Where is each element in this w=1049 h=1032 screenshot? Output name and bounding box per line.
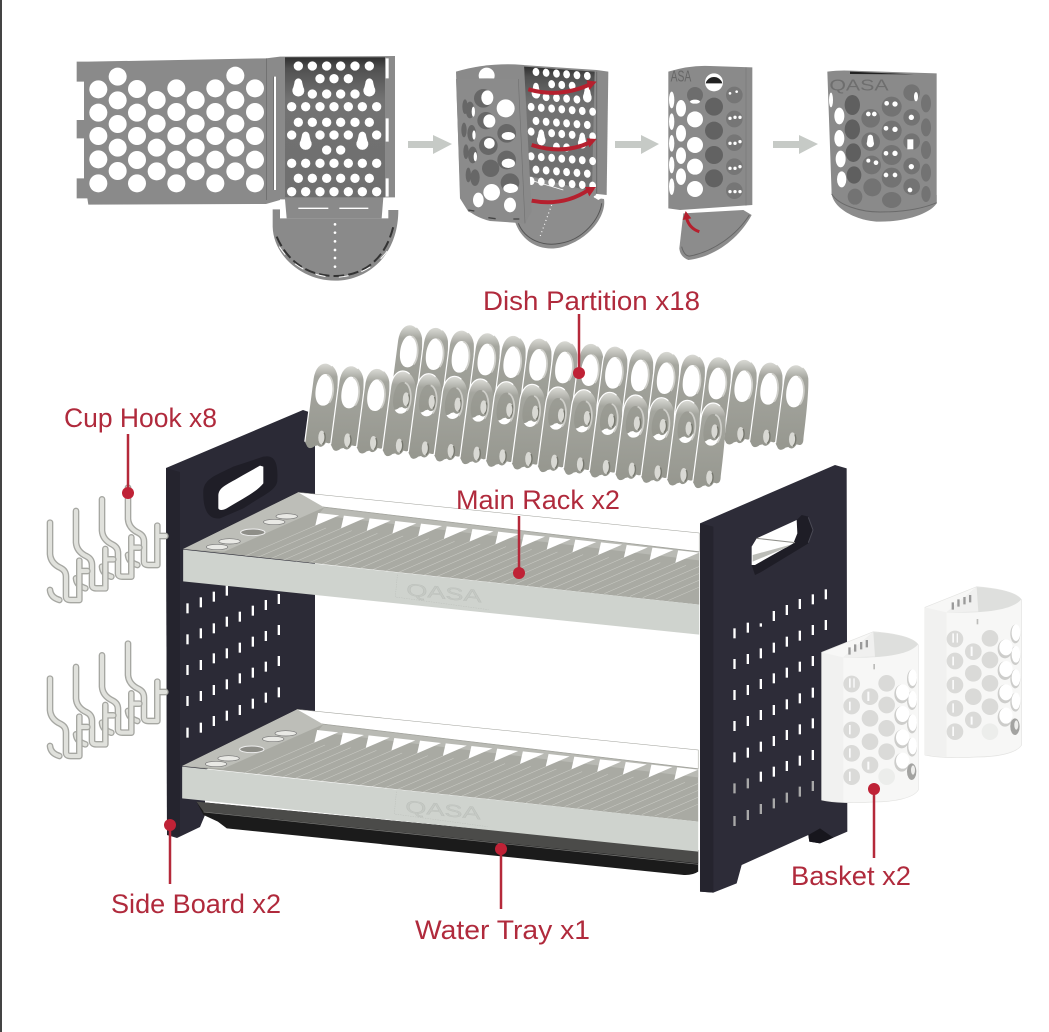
handle of right board: [752, 515, 813, 575]
slots of right board: [733, 589, 827, 826]
base tray: [515, 177, 604, 249]
arrow 3: [773, 135, 818, 154]
label: cup hook: Cup Hook x8: [64, 403, 217, 433]
assembly step 4: finished basket: [827, 70, 937, 222]
flat side sheet with round holes: [77, 57, 280, 205]
label: water tray: Water Tray x1: [415, 915, 590, 945]
assembly step 2: folding: [456, 64, 608, 249]
label: cup hook: [64, 403, 217, 499]
assembly step 3: closing base: [668, 66, 752, 260]
label: side board: Side Board x2: [111, 889, 281, 919]
arrow 2: [615, 135, 659, 154]
left edge line: [0, 0, 2, 1032]
red fold arrows: [528, 80, 597, 202]
label: dish partition: Dish Partition x18: [483, 286, 700, 316]
logo on body: ASA: [671, 69, 692, 86]
label: basket: [791, 783, 911, 891]
body and base lip: [827, 70, 937, 222]
main rack upper: [183, 492, 737, 635]
curved shell: [456, 64, 532, 223]
assembly step 1: unfolded basket: [77, 56, 398, 281]
logo on finished basket: QASA: [829, 78, 890, 95]
label: main rack: Main Rack x2: [456, 485, 620, 515]
label: main rack: [456, 485, 620, 579]
side board left: [166, 410, 315, 838]
perforated back panel: [274, 56, 395, 218]
closed body: [668, 66, 752, 210]
semicircular base: [273, 209, 398, 281]
basket front: [822, 632, 918, 803]
cup hooks lower group: [50, 644, 165, 756]
red arrow: [683, 211, 699, 232]
dish partitions: [305, 325, 808, 488]
label: water tray: [415, 843, 590, 945]
label: basket: Basket x2: [791, 861, 911, 891]
water tray: [196, 802, 698, 875]
label: dish partition: [483, 286, 700, 379]
slots of left board: [186, 586, 280, 738]
base flap: [679, 210, 752, 260]
opened back panel: [523, 65, 608, 199]
label: side board: [111, 819, 281, 919]
cup hooks upper group: [50, 488, 165, 600]
arrow 1: [408, 135, 452, 154]
handle of left board: [203, 456, 277, 518]
side board right: [700, 465, 847, 893]
main rack lower: [182, 709, 736, 852]
basket rear: [925, 587, 1022, 758]
